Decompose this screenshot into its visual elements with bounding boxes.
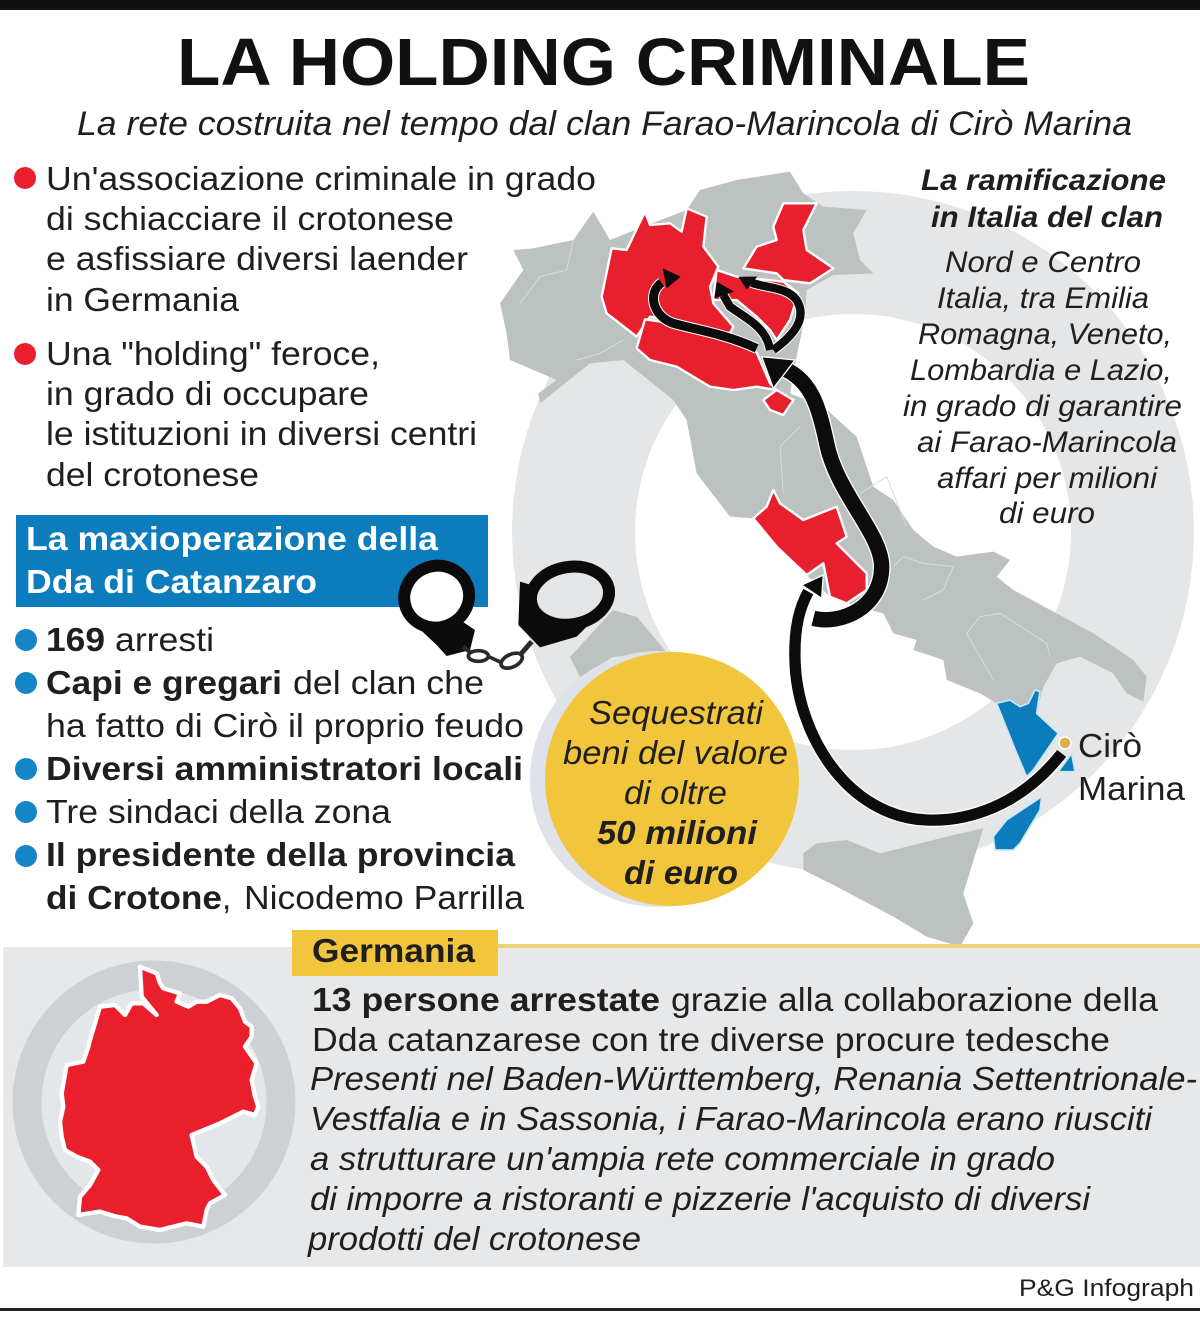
ramification body: Romagna, Veneto, — [918, 318, 1172, 351]
text block: arrests list — [15, 621, 525, 916]
ramification body: Italia, tra Emilia — [937, 282, 1149, 315]
list item: leaders — [15, 664, 524, 744]
list item: president: Il presidente della provincia — [46, 836, 516, 873]
panel: Germania — [3, 930, 1200, 1267]
list item: leaders: del clan che — [293, 664, 484, 701]
ramification body: ai Farao-Marincola — [917, 426, 1177, 459]
text block: clan ramification in Italy — [903, 164, 1182, 530]
Germania body text: prodotti del crotonese — [307, 1220, 641, 1257]
ramification heading: La ramificazione — [921, 164, 1166, 197]
Germania body text — [307, 981, 1197, 1257]
label: Cirò Marina: Cirò — [1078, 727, 1142, 764]
ramification body: Nord e Centro — [945, 246, 1141, 279]
list item: leaders: Capi e gregari — [46, 664, 282, 701]
heading: maxi operation — [16, 515, 488, 607]
Germania body text: a strutturare un'ampia rete commerciale in grado — [310, 1140, 1055, 1177]
bullet two: in grado di occupare — [46, 375, 369, 412]
Germania body text: grazie alla collaborazione della — [671, 981, 1159, 1018]
callout text: Sequestrati — [589, 694, 765, 731]
label: Cirò Marina: Marina — [1078, 770, 1186, 807]
list item: mayors: Tre sindaci della zona — [46, 793, 392, 830]
Germania body text: Dda catanzarese con tre diverse procure tedesche — [312, 1021, 1110, 1058]
label: Cirò Marina — [1078, 727, 1186, 807]
title: LA HOLDING CRIMINALE — [177, 25, 1030, 100]
ramification body: di euro — [999, 497, 1095, 530]
Germany ring — [27, 975, 281, 1229]
Sicily — [803, 828, 983, 947]
ramification heading — [921, 164, 1166, 234]
bullet one: di schiacciare il crotonese — [46, 200, 454, 237]
list item: administrators: Diversi amministratori locali — [46, 750, 523, 787]
list item: president: , — [222, 879, 231, 916]
bullet one: Un'associazione criminale in grado — [46, 160, 596, 197]
callout text: beni del valore — [563, 734, 788, 771]
Cirò Marina location dot — [1059, 737, 1071, 749]
callout disc — [545, 652, 799, 906]
Germania heading: Germania — [312, 932, 476, 969]
panel background — [3, 947, 1200, 1267]
bullet two — [14, 335, 477, 493]
list item: president: di Crotone — [46, 879, 222, 916]
bullet two: del crotonese — [46, 456, 259, 493]
callout: seized assets — [530, 651, 799, 907]
subtitle: La rete costruita nel tempo dal clan Farao-Marincola di Cirò Marina — [77, 105, 1132, 143]
bullet two: le istituzioni in diversi centri — [46, 415, 477, 452]
ramification heading: in Italia del clan — [931, 201, 1163, 234]
list item: arrests: arresti — [115, 621, 214, 658]
bullet two: Una "holding" feroce, — [46, 335, 380, 372]
ramification body: in grado di garantire — [903, 390, 1182, 423]
text block: intro bullets — [14, 160, 596, 493]
ramification body: affari per milioni — [937, 462, 1158, 495]
callout halo — [530, 651, 786, 907]
list item: arrests: 169 — [46, 621, 105, 658]
callout text: di oltre — [624, 774, 727, 811]
heading: maxi operation: Dda di Catanzaro — [26, 563, 317, 600]
callout text: 50 milioni — [597, 814, 758, 851]
heading rule — [498, 944, 1200, 948]
Calabria in blue — [993, 690, 1075, 850]
Germany map — [60, 967, 258, 1230]
Sardinia — [570, 610, 667, 677]
region borders — [520, 240, 1050, 680]
Germania heading — [292, 930, 498, 976]
credit: P&G Infograph — [1019, 1275, 1194, 1302]
list item: leaders: ha fatto di Cirò il proprio feudo — [46, 707, 524, 744]
bullet one — [14, 160, 596, 318]
list item: president: Nicodemo Parrilla — [244, 879, 525, 916]
arrows: Emilia to Lombardia and Veneto — [653, 268, 801, 350]
arrow: Lazio to Emilia — [762, 357, 882, 620]
list item: arrests — [15, 621, 214, 658]
icon: handcuffs — [395, 557, 614, 671]
Germania body text: di imporre a ristoranti e pizzerie l'acquisto di diversi — [310, 1180, 1092, 1217]
ramification body — [903, 246, 1182, 530]
ramification body: Lombardia e Lazio, — [910, 354, 1172, 387]
Germania body text: Presenti nel Baden-Württemberg, Renania Settentrionale- — [310, 1060, 1197, 1097]
map background ring — [512, 191, 1194, 873]
heading: maxi operation: La maxioperazione della — [26, 520, 439, 557]
arrow: Cirò to Lazio — [795, 575, 1062, 820]
bullet one: in Germania — [46, 281, 240, 318]
Italy silhouette — [500, 172, 1147, 947]
highlighted northern and central regions — [602, 203, 867, 603]
panel: Italy map — [500, 172, 1194, 947]
Germania body text: 13 persone arrestate — [312, 981, 660, 1018]
callout text: di euro — [624, 854, 738, 891]
list item: president — [15, 836, 525, 916]
Germania body text: Vestfalia e in Sassonia, i Farao-Marincola erano riusciti — [310, 1100, 1154, 1137]
callout text — [563, 694, 788, 891]
bullet one: e asfissiare diversi laender — [46, 240, 468, 277]
